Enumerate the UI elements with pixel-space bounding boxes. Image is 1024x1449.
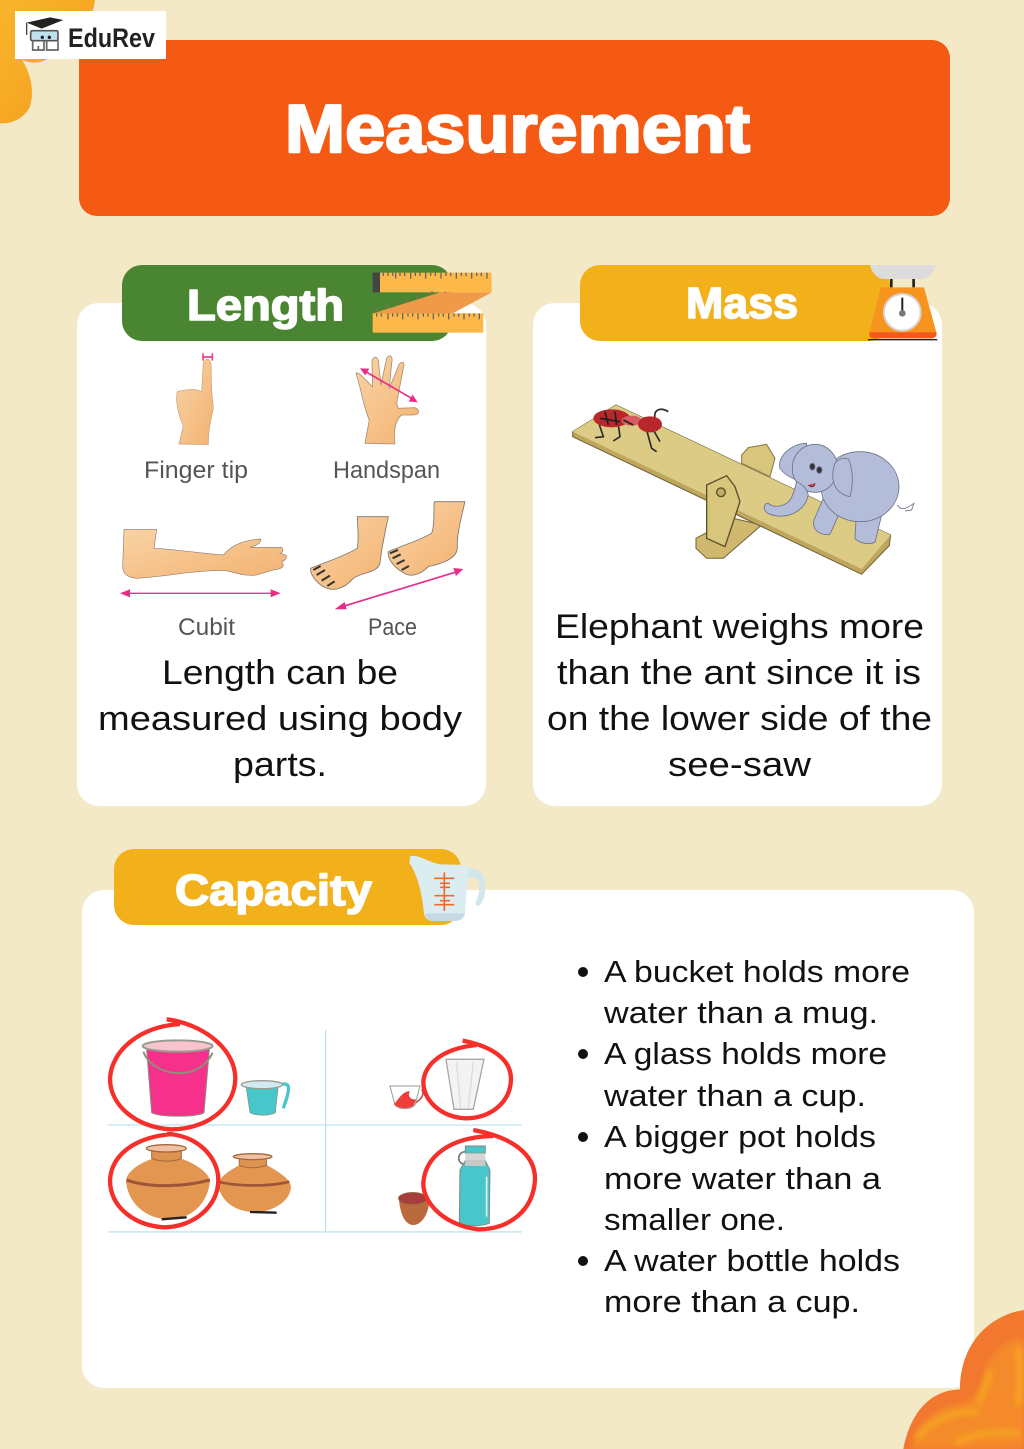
bullet list: more water than a: [604, 1161, 882, 1196]
heading: Length: Length: [187, 281, 344, 330]
icon: cubit arm: [120, 529, 286, 597]
icon: cup: [390, 1086, 423, 1109]
decoration: bottom-right orange blob: [903, 1310, 1024, 1449]
text: length description: [98, 654, 462, 784]
icon: finger tip: [177, 353, 213, 445]
bullet list: water than a mug.: [603, 995, 878, 1030]
icon: bucket: [143, 1040, 213, 1116]
heading: Capacity: [114, 849, 461, 925]
logo: EduRev: [15, 11, 166, 59]
caption: Cubit: Cubit: [178, 614, 235, 641]
bullet list: A glass holds more: [604, 1036, 887, 1071]
caption: Handspan: Handspan: [333, 457, 440, 484]
bullet list: A bigger pot holds: [604, 1119, 876, 1154]
text: mass description: [547, 608, 932, 784]
icon: ant: [593, 409, 668, 452]
text: length description: measured using body: [98, 700, 462, 738]
icon: glass: [446, 1059, 484, 1109]
bullet list: A bucket holds more: [604, 954, 910, 989]
icon: water bottle: [459, 1146, 490, 1226]
icon: graduation cap logo: [27, 17, 63, 50]
panel: mass: [533, 265, 942, 806]
bullet list: [578, 954, 910, 1319]
icon: feet: [311, 502, 465, 609]
text: mass description: see-saw: [668, 746, 811, 784]
heading: Length: [122, 265, 452, 341]
illustration: see-saw with ant and elephant: [573, 405, 914, 574]
icon: elephant: [764, 443, 914, 544]
text: EduRev: EduRev: [68, 23, 155, 53]
text: mass description: on the lower side of the: [547, 700, 932, 738]
red circles: [110, 1019, 535, 1229]
text: length description: parts.: [233, 746, 327, 784]
bullet list: A water bottle holds: [604, 1243, 900, 1278]
text: mass description: than the ant since it is: [557, 654, 921, 692]
text: length description: Length can be: [162, 654, 398, 692]
icon: handspan: [356, 356, 419, 444]
title: Measurement: [285, 91, 750, 167]
caption: Finger tip: Finger tip: [144, 457, 248, 484]
panel: capacity: [82, 849, 974, 1388]
icon: kitchen scale: [868, 265, 937, 340]
bullet list: smaller one.: [604, 1202, 785, 1237]
decoration: top-left orange blob: [0, 0, 95, 123]
icon: clay cup: [399, 1193, 429, 1225]
illustration: body parts: [120, 353, 465, 609]
heading: Capacity: Capacity: [175, 866, 373, 915]
title banner: [79, 40, 950, 216]
icon: mug: [241, 1081, 289, 1115]
icon: tape measure: [373, 273, 492, 333]
text: mass description: Elephant weighs more: [555, 608, 924, 646]
bullet list: more than a cup.: [604, 1284, 860, 1319]
illustration: capacity comparisons: [108, 1019, 535, 1232]
icon: small pot: [218, 1154, 291, 1213]
bullet list: water than a cup.: [603, 1078, 866, 1113]
heading: Mass: [580, 265, 890, 341]
icon: big pot: [126, 1145, 210, 1219]
panel: length: [77, 265, 492, 806]
heading: Mass: Mass: [686, 279, 798, 328]
caption: Pace: Pace: [368, 614, 417, 641]
icon: measuring jug: [409, 856, 485, 921]
